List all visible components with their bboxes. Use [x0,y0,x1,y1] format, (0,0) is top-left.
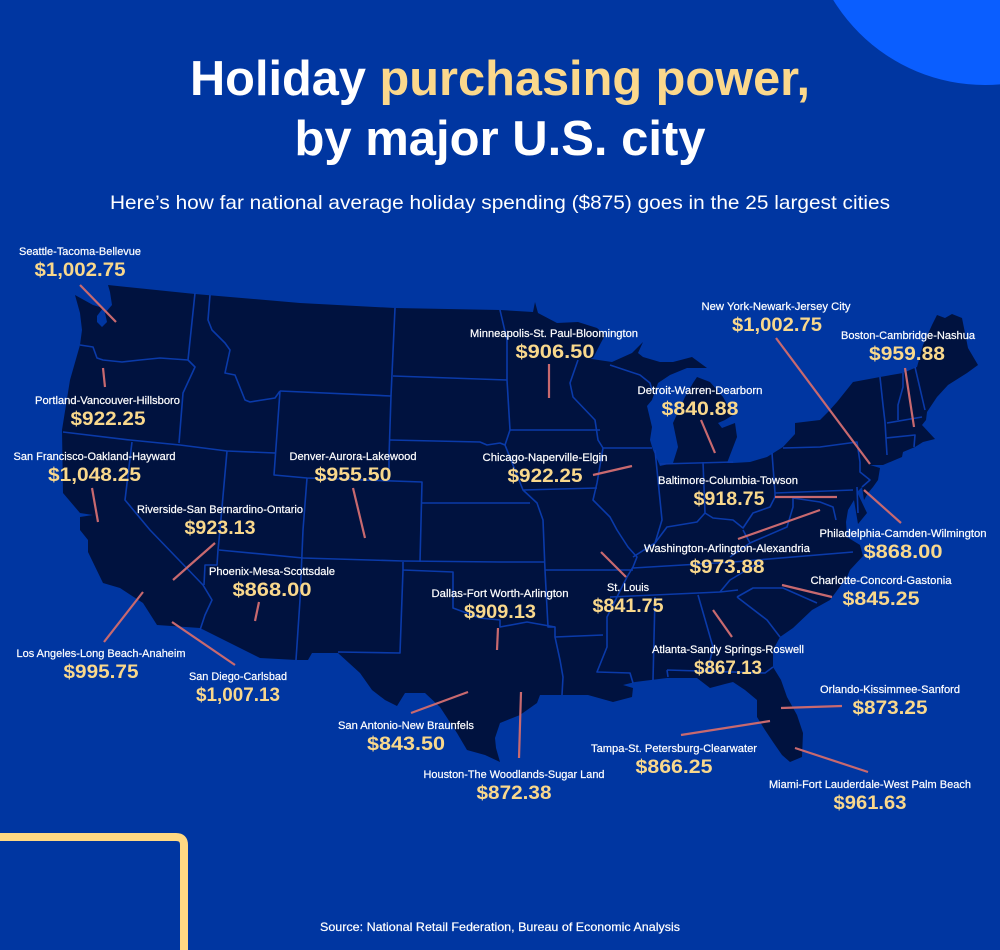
label: Tampa: Tampa-St. Petersburg-Clearwater [591,743,757,755]
label: Houston: Houston-The Woodlands-Sugar Land [424,769,604,781]
label: Chicago [482,452,608,487]
label: Seattle: $1,002.75 [34,260,126,281]
label: Charlotte: Charlotte-Concord-Gastonia [810,575,952,587]
label: Miami: Miami-Fort Lauderdale-West Palm Beach [769,779,971,791]
label: Los Angeles [16,648,186,683]
label: Charlotte [810,575,952,610]
label: San Diego: $1,007.13 [196,685,280,706]
label: Phoenix [209,566,335,601]
label: Seattle: Seattle-Tacoma-Bellevue [19,246,141,258]
label: Tampa: $866.25 [636,757,713,778]
label: San Diego [189,671,287,706]
label: San Francisco [14,451,176,486]
label: Atlanta: $867.13 [694,658,762,679]
label: Baltimore [658,475,798,510]
label: Los Angeles: Los Angeles-Long Beach-Anaheim [16,648,186,660]
label: Minneapolis: $906.50 [516,342,594,363]
label: Orlando [820,684,960,719]
label: Miami [769,779,971,814]
label: Riverside [137,504,303,539]
label: Miami: $961.63 [834,793,906,814]
label: St. Louis [592,582,664,617]
label: San Francisco: $1,048.25 [48,465,141,486]
label: Detroit [638,385,762,420]
label: Washington: $973.88 [690,557,764,578]
title: Holiday purchasing power, [190,52,810,106]
label: Houston [424,769,604,804]
label: St. Louis: $841.75 [592,596,664,617]
label: New York: $1,002.75 [732,315,822,336]
label: Dallas [432,588,568,623]
label: Minneapolis: Minneapolis-St. Paul-Bloomington [470,328,638,340]
label: Washington: Washington-Arlington-Alexandria [644,543,811,555]
decorative circle, top right [807,0,1000,85]
label: Philadelphia: Philadelphia-Camden-Wilmington [820,528,986,540]
label: Phoenix: Phoenix-Mesa-Scottsdale [209,566,335,578]
label: Chicago: Chicago-Naperville-Elgin [482,452,608,464]
label: Minneapolis [470,328,638,363]
label: Detroit: Detroit-Warren-Dearborn [638,385,762,397]
label: Denver [290,451,416,486]
label: San Diego: San Diego-Carlsbad [189,671,287,683]
label: Philadelphia: $868.00 [864,542,942,563]
label: Atlanta: Atlanta-Sandy Springs-Roswell [652,644,804,656]
label: Washington [644,543,811,578]
label: Denver: $955.50 [314,465,392,486]
label: Portland: $922.25 [70,409,146,430]
label: Riverside: Riverside-San Bernardino-Ontario [137,504,303,516]
label: New York: New York-Newark-Jersey City [702,301,851,313]
label: Boston: $959.88 [869,344,945,365]
map: state borders [63,293,925,695]
decorative yellow bracket, bottom left [0,837,184,950]
label: Riverside: $923.13 [184,518,256,539]
label: Boston: Boston-Cambridge-Nashua [841,330,976,342]
title [190,52,810,166]
label: Philadelphia [820,528,986,563]
label: Portland: Portland-Vancouver-Hillsboro [35,395,180,407]
subtitle: Here’s how far national average holiday spending ($875) goes in the 25 largest cities [110,192,890,214]
label: New York [702,301,851,336]
label: Tampa [591,743,757,778]
label: Baltimore: Baltimore-Columbia-Towson [658,475,798,487]
label: San Antonio [338,720,474,755]
label: Atlanta [652,644,804,679]
label: San Francisco: San Francisco-Oakland-Hayward [14,451,176,463]
map: land silhouette [62,285,978,762]
label: Detroit: $840.88 [662,399,738,420]
label: Charlotte: $845.25 [842,589,920,610]
label: San Antonio: San Antonio-New Braunfels [338,720,474,732]
label: San Antonio: $843.50 [367,734,445,755]
title: by major U.S. city [294,112,706,166]
label: Houston: $872.38 [476,783,552,804]
label: Baltimore: $918.75 [694,489,765,510]
label: Boston [841,330,976,365]
label: Orlando: $873.25 [852,698,928,719]
label: Phoenix: $868.00 [232,580,312,601]
label: Portland [35,395,180,430]
label: Los Angeles: $995.75 [64,662,139,683]
leader lines [80,285,914,772]
label: Chicago: $922.25 [508,466,583,487]
map of the United States [62,285,978,762]
label: Seattle [19,246,141,281]
source note: Source: National Retail Federation, Bureau of Economic Analysis [320,920,680,934]
label: Orlando: Orlando-Kissimmee-Sanford [820,684,960,696]
label: Dallas: Dallas-Fort Worth-Arlington [432,588,568,600]
label: St. Louis: St. Louis [607,582,649,594]
label: Denver: Denver-Aurora-Lakewood [290,451,416,463]
label: Dallas: $909.13 [464,602,536,623]
